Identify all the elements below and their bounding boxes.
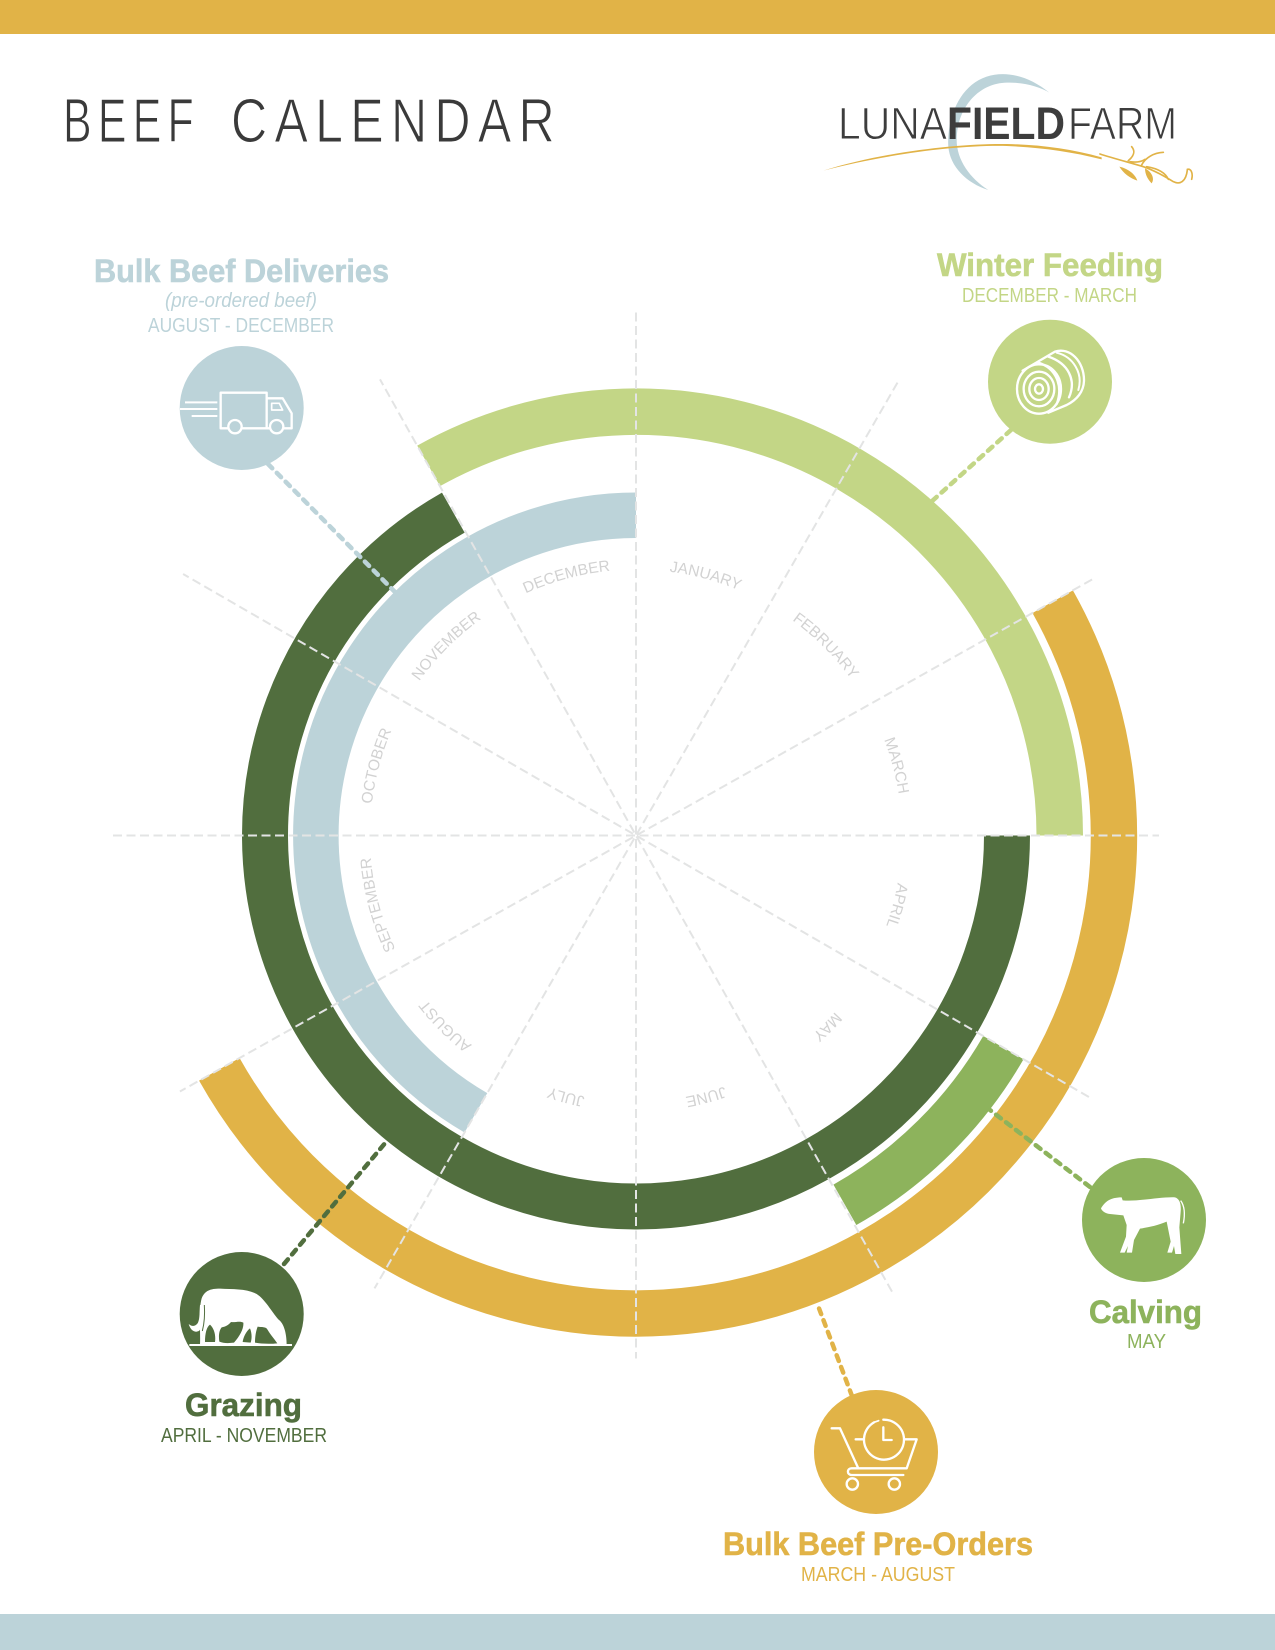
month labels: SEPTEMBER <box>360 858 394 952</box>
label: calving: MAY <box>1127 1330 1166 1353</box>
ring: bulk beef pre-orders, March to August <box>219 602 1114 1313</box>
label: bulk beef pre-orders: Bulk Beef Pre-Orders <box>723 1526 1033 1562</box>
icon: delivery truck <box>180 346 304 470</box>
icon: shopping cart with clock <box>814 1390 938 1514</box>
month labels: MARCH <box>884 737 909 793</box>
label: winter feeding: Winter Feeding <box>937 247 1163 283</box>
month labels: MAY <box>816 1012 842 1042</box>
month labels: AUGUST <box>418 1002 472 1050</box>
month labels <box>360 560 909 1108</box>
leader: deliveries <box>268 464 395 592</box>
label: bulk beef deliveries <box>94 253 389 337</box>
month labels: OCTOBER <box>362 728 391 803</box>
leader: grazing <box>284 1142 386 1264</box>
label: grazing: APRIL - NOVEMBER <box>161 1424 327 1447</box>
label: bulk beef deliveries: (pre-ordered beef) <box>165 290 317 312</box>
ring: grazing, April to November <box>265 513 1007 1206</box>
logo: Luna Field Farm: LUNA <box>838 98 947 149</box>
icon: calf <box>1082 1158 1206 1282</box>
month labels: JUNE <box>686 1087 725 1108</box>
leader: pre-orders <box>817 1303 852 1396</box>
month labels: JULY <box>546 1088 584 1106</box>
label: bulk beef deliveries: Bulk Beef Deliveries <box>94 253 389 289</box>
ring: calving, May <box>845 1048 1003 1205</box>
logo: Luna Field Farm: FARM <box>1068 98 1177 149</box>
label: grazing <box>161 1387 327 1447</box>
label: calving: Calving <box>1089 1294 1202 1330</box>
leader: calving <box>990 1110 1090 1187</box>
month labels: NOVEMBER <box>412 612 481 680</box>
ring: winter feeding, December to March <box>429 412 1060 836</box>
month dividers <box>113 312 1159 1358</box>
icon: hay bale <box>988 320 1112 444</box>
bottom bar <box>0 1614 1275 1650</box>
month labels: APRIL <box>886 882 908 926</box>
logo: Luna Field Farm <box>823 74 1192 190</box>
ring: bulk beef deliveries, August to December <box>316 515 636 1113</box>
title <box>63 87 562 156</box>
logo: Luna Field Farm: FIELD <box>947 98 1065 149</box>
label: winter feeding <box>937 247 1163 307</box>
leader: winter feeding <box>931 430 1011 502</box>
label: grazing: Grazing <box>185 1387 302 1423</box>
label: bulk beef deliveries: AUGUST - DECEMBER <box>148 314 334 337</box>
title: BEEF <box>63 87 200 156</box>
month labels: DECEMBER <box>522 560 610 593</box>
icon: grazing cow <box>180 1252 304 1376</box>
month labels: JANUARY <box>670 562 742 588</box>
month labels: FEBRUARY <box>793 612 860 676</box>
label: bulk beef pre-orders: MARCH - AUGUST <box>801 1563 955 1586</box>
label: calving <box>1089 1294 1202 1353</box>
label: winter feeding: DECEMBER - MARCH <box>962 284 1137 307</box>
title: CALENDAR <box>231 87 562 156</box>
top bar <box>0 0 1275 34</box>
label: bulk beef pre-orders <box>723 1526 1033 1586</box>
